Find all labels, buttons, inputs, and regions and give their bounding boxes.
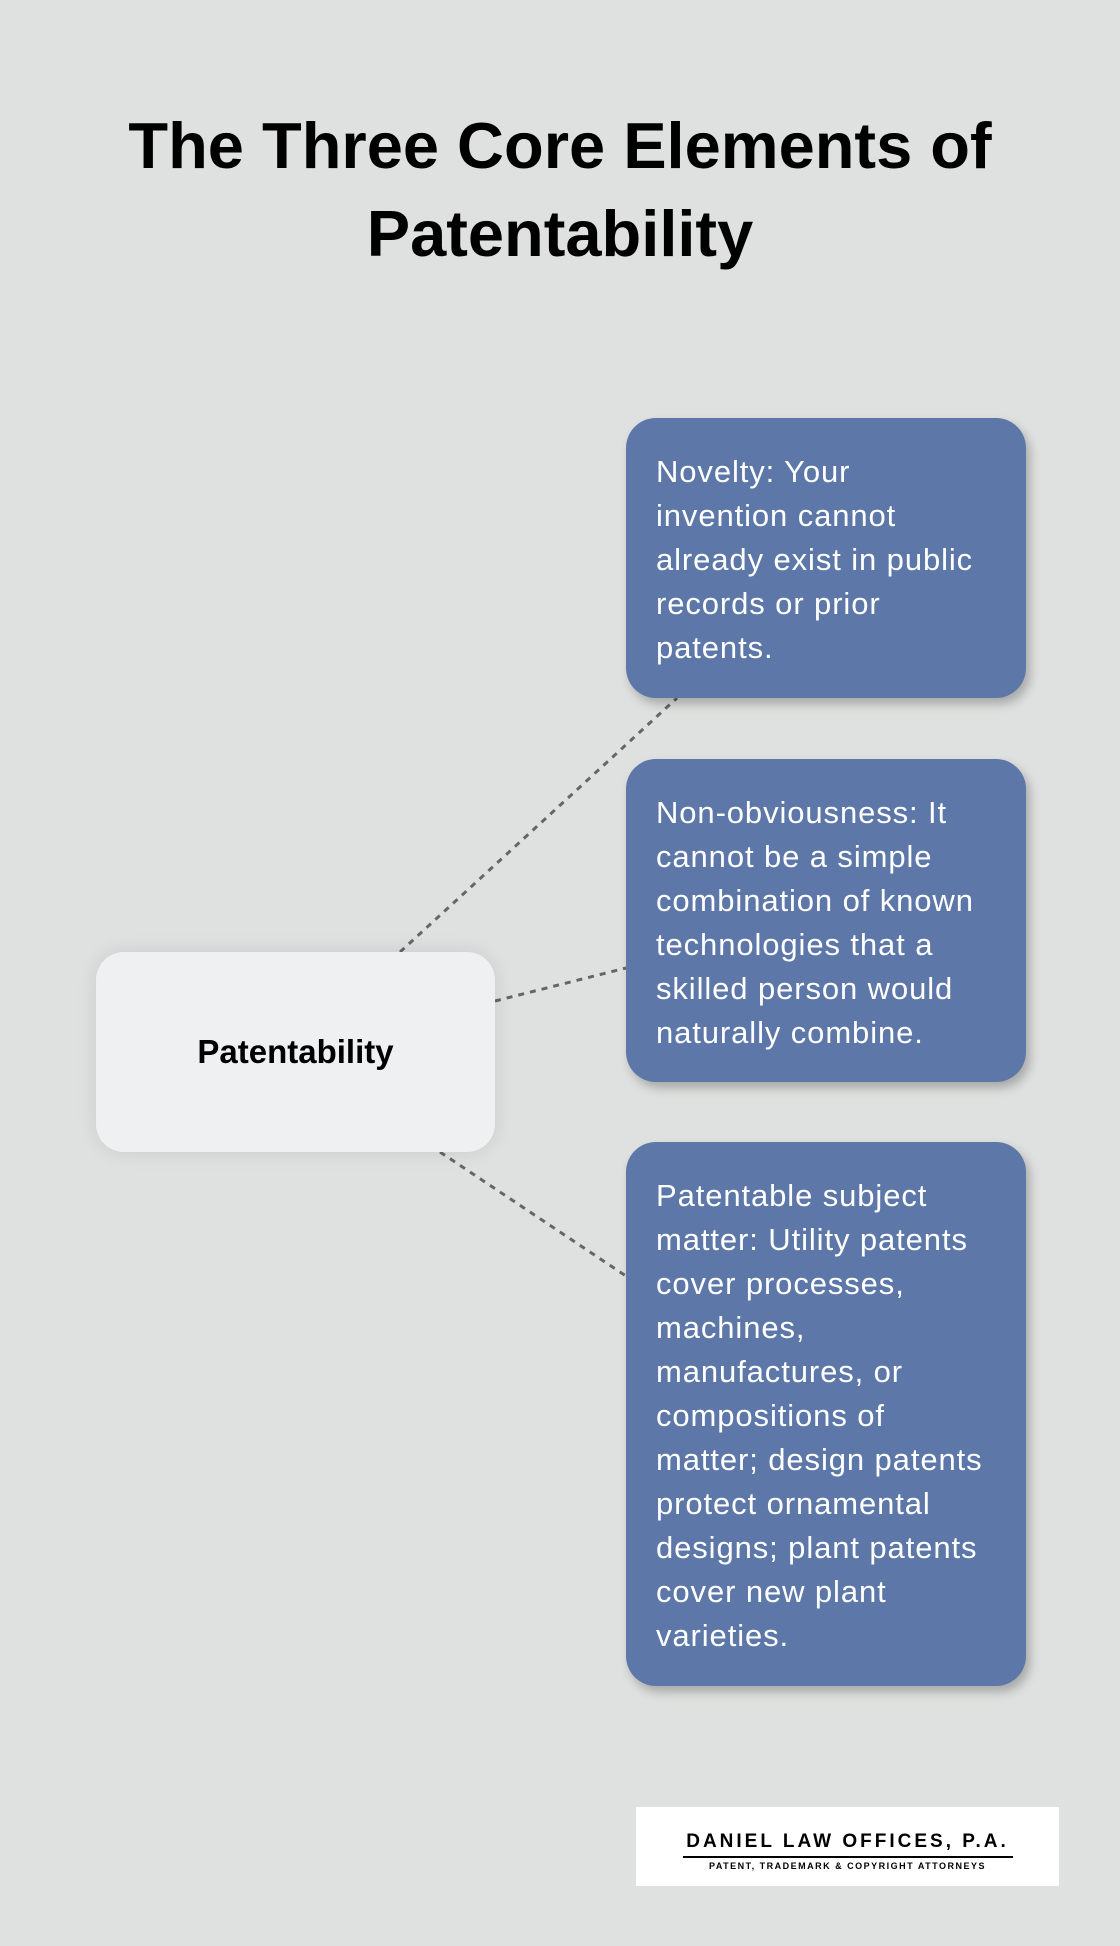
box: non-obviousness: skilled person would [656, 971, 953, 1006]
box: subject matter: Patentable subject [656, 1178, 927, 1213]
box: subject matter: designs; plant patents [656, 1530, 977, 1565]
box: non-obviousness: cannot be a simple [656, 839, 932, 874]
box: subject matter: protect ornamental [656, 1486, 931, 1521]
box: novelty: already exist in public [656, 542, 973, 577]
box: subject matter [626, 1142, 1026, 1686]
box: non-obviousness: combination of known [656, 883, 974, 918]
box: non-obviousness: naturally combine. [656, 1015, 924, 1050]
logo [636, 1807, 1059, 1886]
box: novelty [626, 418, 1026, 698]
box: subject matter: machines, [656, 1310, 805, 1345]
box: novelty: records or prior [656, 586, 881, 621]
box: subject matter: cover new plant [656, 1574, 887, 1609]
box: novelty: invention cannot [656, 498, 896, 533]
box: subject matter: varieties. [656, 1618, 789, 1653]
center node: Patentability [197, 1033, 394, 1070]
box: subject matter: compositions of [656, 1398, 885, 1433]
box: subject matter: cover processes, [656, 1266, 905, 1301]
box: subject matter: matter; design patents [656, 1442, 983, 1477]
logo: PATENT, TRADEMARK & COPYRIGHT ATTORNEYS [709, 1861, 986, 1871]
title: Patentability [367, 197, 753, 270]
box: non-obviousness [626, 759, 1026, 1082]
title [128, 109, 992, 270]
box: subject matter: manufactures, or [656, 1354, 903, 1389]
box: non-obviousness: technologies that a [656, 927, 933, 962]
center node [96, 952, 495, 1152]
box: subject matter: matter: Utility patents [656, 1222, 968, 1257]
logo: DANIEL LAW OFFICES, P.A. [686, 1831, 1009, 1852]
title: The Three Core Elements of [128, 109, 992, 182]
box: novelty: Novelty: Your [656, 454, 850, 489]
box: non-obviousness: Non-obviousness: It [656, 795, 947, 830]
box: novelty: patents. [656, 630, 774, 665]
